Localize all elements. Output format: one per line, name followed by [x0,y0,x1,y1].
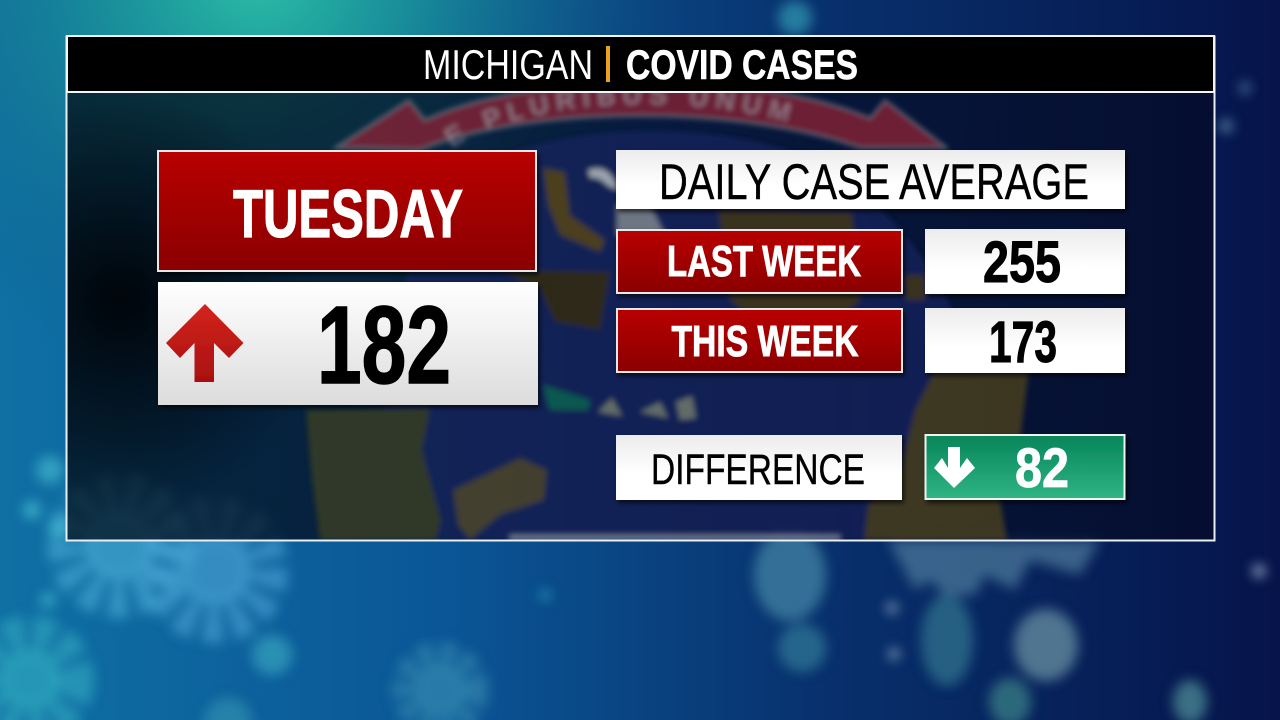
seal: blue field [385,131,988,540]
seal: bottom scroll text [510,535,840,541]
label: this week [617,309,902,372]
label: this week: THIS WEEK [672,317,859,366]
value: difference: 82 [1015,436,1069,499]
label: difference [616,435,902,500]
seal: pale tree details [598,396,696,420]
value: last week: 255 [983,230,1061,295]
icon: white down arrow [934,447,975,488]
panel: Tuesday value [158,282,538,407]
panel: dark main panel with blurred seal [66,36,1216,542]
seal: banner motto [448,104,856,150]
seal: right eagle wing [716,209,862,308]
title bar [67,36,1214,92]
value: this week [925,308,1125,375]
seal: blurred Michigan coat of arms [304,93,1030,540]
heading: daily case average: DAILY CASE AVERAGE [659,154,1089,210]
value: this week: 173 [989,310,1057,375]
seal: left elk [306,408,441,540]
value: last week [925,229,1125,295]
seal: shore [453,458,547,540]
title: Michigan: MICHIGAN [423,41,593,88]
label: last week [617,230,902,293]
seal: eagle body [617,205,665,235]
seal: right elk [860,373,1030,540]
panel: Tuesday value: 182 [317,284,451,407]
seal: eagle head [588,168,618,190]
seal: eagle wing left [543,168,605,252]
seal: blurred Michigan coat of arms: E PLURIBUS UNUM [441,93,794,149]
label: difference: DIFFERENCE [651,446,865,494]
seal: banner [332,93,950,150]
label: last week: LAST WEEK [667,237,861,286]
value: difference [926,435,1124,499]
panel: Tuesday label [158,151,536,271]
panel: Tuesday label: TUESDAY [233,176,463,252]
title divider [606,46,610,82]
title: Covid Cases: COVID CASES [626,41,858,88]
seal: green shore [543,385,590,410]
icon: red up arrow [166,304,244,382]
